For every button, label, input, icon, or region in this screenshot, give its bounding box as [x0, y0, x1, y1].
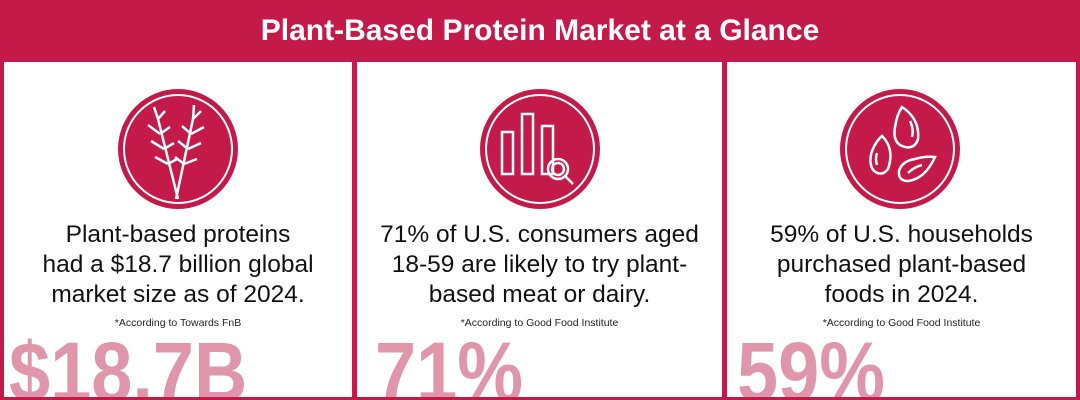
text block: foods in 2024.: [825, 281, 978, 308]
text block: [42, 221, 314, 308]
panel: market size: [4, 62, 352, 397]
source note: *According to Towards FnB: [115, 317, 241, 329]
panel: households: [727, 62, 1076, 397]
text block: 71% of U.S. consumers aged: [380, 221, 699, 248]
text block: [380, 221, 699, 308]
icon: wheat: [118, 89, 238, 209]
text block: had a $18.7 billion global: [42, 251, 314, 278]
text block: [770, 221, 1033, 308]
icon: seeds: [840, 89, 960, 209]
text block: purchased plant-based: [777, 251, 1026, 278]
text block: based meat or dairy.: [429, 281, 650, 308]
panel: consumers: [357, 62, 722, 397]
text block: market size as of 2024.: [51, 281, 305, 308]
text block: 18-59 are likely to try plant-: [392, 251, 687, 278]
text block: 59% of U.S. households: [770, 221, 1033, 248]
source note: *According to Good Food Institute: [823, 317, 980, 329]
text block: Plant-based proteins: [66, 221, 290, 248]
source note: *According to Good Food Institute: [461, 317, 618, 329]
title: Plant-Based Protein Market at a Glance: [261, 14, 819, 47]
icon: chart with magnifier: [480, 89, 600, 209]
